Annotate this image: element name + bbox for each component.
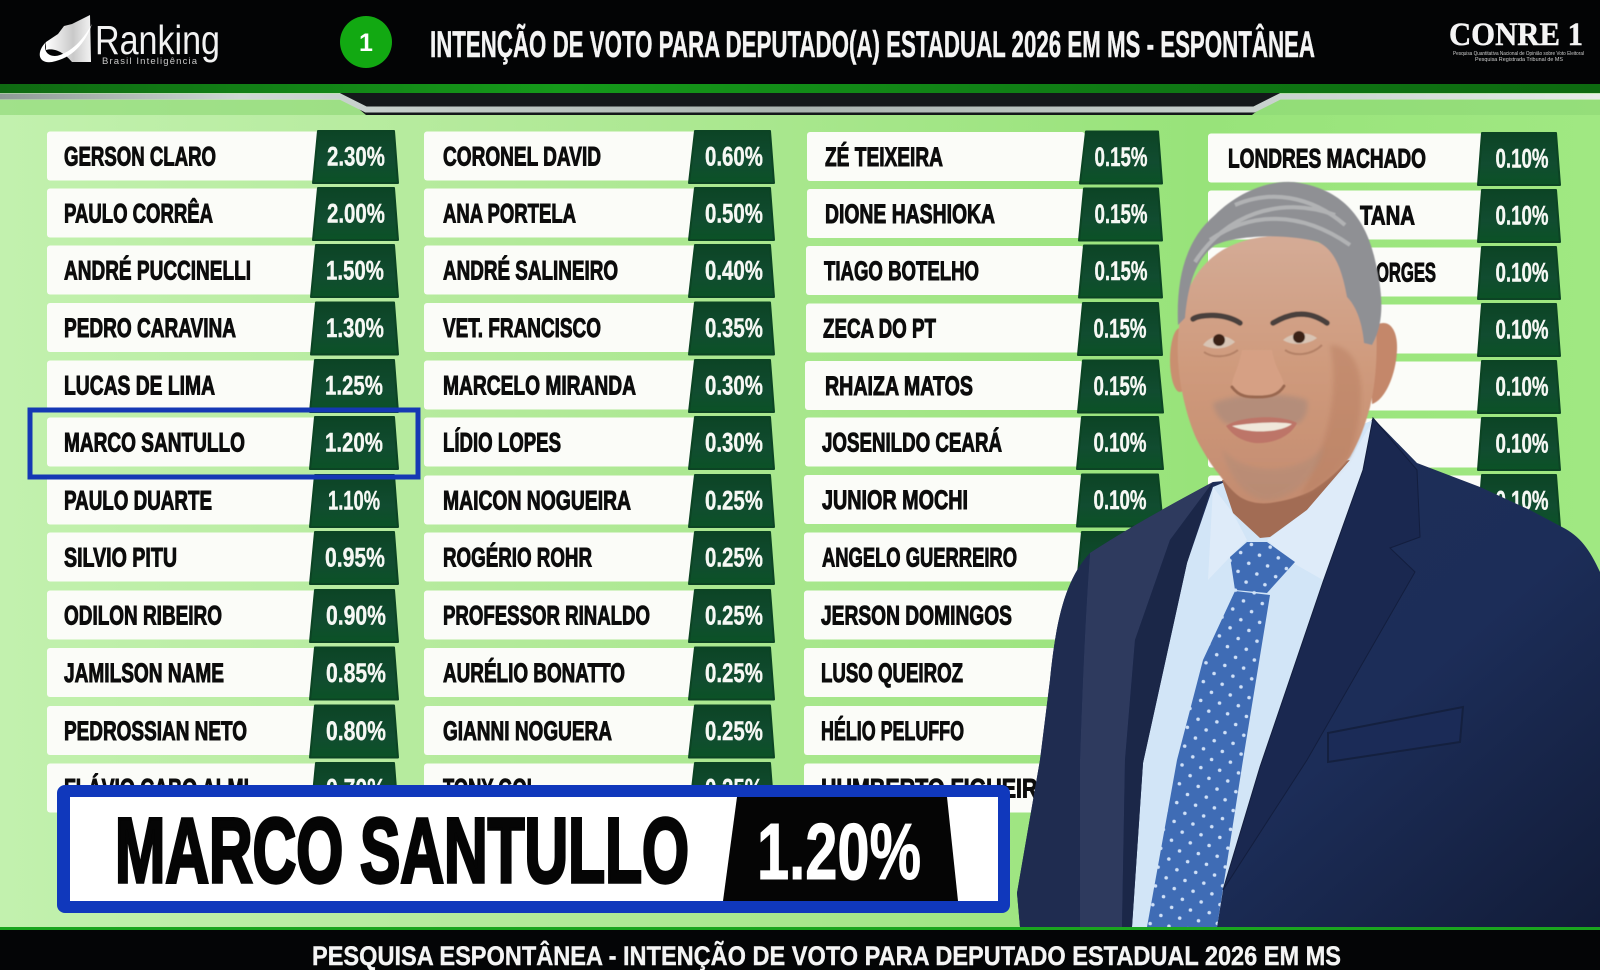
row: Rhaiza Matos: 0.15% <box>1094 371 1146 401</box>
row: Maicon Nogueira: MAICON NOGUEIRA <box>443 486 631 516</box>
row: Luso Queiroz <box>804 648 1082 697</box>
row: Zé Teixeira: 0.15% <box>1094 142 1148 172</box>
row: Londres Machado: LONDRES MACHADO <box>1228 144 1426 174</box>
row: Zeca do PT <box>806 303 1162 355</box>
row: André Puccinelli <box>47 245 398 297</box>
logo icon <box>40 15 92 62</box>
eyebrows <box>1193 315 1240 323</box>
row: Josenildo Ceará <box>805 417 1163 469</box>
highlight box around Marco Santullo row <box>30 410 418 477</box>
row: Professor Rinaldo: 0.25% <box>705 600 763 630</box>
row: Londres Machado <box>1208 133 1560 185</box>
row: Tony Gol: TONY GOL <box>443 774 538 804</box>
panel: candidates column 3 <box>804 132 1163 812</box>
row: hidden name 6 <box>1208 418 1560 470</box>
row: André Puccinelli: 1.50% <box>326 256 384 286</box>
row: Tony Gol: 0.25% <box>705 774 763 804</box>
hair <box>1178 182 1381 345</box>
row: hidden name 5 <box>1208 361 1560 413</box>
row: Paulo Corrêa <box>47 188 398 240</box>
row: Marco Santullo <box>47 417 398 469</box>
row: Zé Teixeira <box>807 132 1162 184</box>
row: Paulo Duarte: PAULO DUARTE <box>64 486 212 516</box>
row: Paulo Duarte <box>47 475 398 527</box>
callout black badge <box>723 797 958 901</box>
row: Aurélio Bonatto: AURÉLIO BONATTO <box>443 657 625 688</box>
row: Lucas de Lima: 1.25% <box>325 370 383 400</box>
row: Pedro Caravina: PEDRO CARAVINA <box>64 313 236 343</box>
row: Zeca do PT: 0.15% <box>1094 314 1146 344</box>
row: Jamilson Name <box>47 648 398 700</box>
row: Aurélio Bonatto <box>424 648 774 700</box>
callout white plate <box>70 797 998 901</box>
row: Junior Mochi: 0.10% <box>1094 485 1146 515</box>
callout percent: 1.20% <box>757 807 921 896</box>
row: Odilon Ribeiro: 0.90% <box>326 600 386 630</box>
row: Gianni Noguera <box>424 706 774 758</box>
row: Odilon Ribeiro: ODILON RIBEIRO <box>64 600 222 630</box>
row: Pedrossian Neto <box>47 706 398 758</box>
callout name: MARCO SANTULLO <box>115 800 689 902</box>
row: name ending in TANA <box>1208 190 1560 242</box>
row: Paulo Corrêa: PAULO CORRÊA <box>64 198 213 228</box>
row: Jamilson Name: 0.85% <box>326 658 386 688</box>
neck <box>1222 460 1350 538</box>
row: Gianni Noguera: GIANNI NOGUERA <box>443 716 612 746</box>
row: Tiago Botelho: 0.15% <box>1094 256 1148 286</box>
row: Rhaiza Matos <box>805 360 1163 412</box>
row: Tiago Botelho <box>806 246 1162 298</box>
footer bar <box>0 927 1600 970</box>
row: name ending in TANA: 0.10% <box>1496 200 1548 230</box>
row: hidden name 5: 0.10% <box>1496 372 1548 402</box>
row: name ending in ORGES: 0.10% <box>1496 258 1548 288</box>
header bar <box>0 0 1600 115</box>
face <box>1178 236 1377 503</box>
row: Ana Portela: 0.50% <box>705 198 763 228</box>
callout: Marco Santullo 1.20% <box>57 785 1010 913</box>
row: Paulo Duarte: 1.10% <box>328 486 380 516</box>
panel: candidates column 2 <box>424 131 774 815</box>
left jacket front <box>1080 482 1213 927</box>
left sleeve shadow <box>1017 553 1090 927</box>
row: hidden name 7 <box>1208 475 1560 527</box>
row: Coronel David <box>424 131 774 183</box>
row: hidden name 4 <box>1208 304 1560 356</box>
row: Josenildo Ceará: JOSENILDO CEARÁ <box>822 426 1002 458</box>
callout blue frame <box>57 785 1010 913</box>
row: Odilon Ribeiro <box>47 590 398 642</box>
mouth <box>1226 417 1297 443</box>
logo: Ranking Brasil Inteligência <box>40 15 220 67</box>
row: Lídio Lopes: 0.30% <box>705 428 763 458</box>
row: Silvio Pitu: 0.95% <box>325 542 385 572</box>
row: Tiago Botelho: TIAGO BOTELHO <box>824 256 979 286</box>
breast pocket <box>1328 707 1463 762</box>
shirt <box>1132 420 1373 927</box>
right cheek shade <box>1300 345 1361 496</box>
row: Pedro Caravina <box>47 302 398 354</box>
row: Maicon Nogueira: 0.25% <box>705 486 763 516</box>
row: Zé Teixeira: ZÉ TEIXEIRA <box>825 141 943 172</box>
row: Ana Portela <box>424 188 774 240</box>
row: Silvio Pitu <box>47 532 398 584</box>
ears <box>1170 328 1190 392</box>
row: Flávio Cabo Almi: FLÁVIO CABO ALMI <box>64 772 249 804</box>
suit body <box>1017 418 1600 927</box>
panel: candidates column 1 <box>47 131 398 815</box>
row: Josenildo Ceará: 0.10% <box>1094 428 1146 458</box>
row: Lídio Lopes <box>424 417 774 469</box>
row: Pedro Caravina: 1.30% <box>326 313 384 343</box>
row: André Salineiro <box>424 245 774 297</box>
row: Rhaiza Matos: RHAIZA MATOS <box>825 371 973 401</box>
row: Gerson Claro <box>47 131 398 183</box>
row: Marcelo Miranda: 0.30% <box>705 370 763 400</box>
row: Lucas de Lima: LUCAS DE LIMA <box>64 370 215 400</box>
row: Rogério Rohr: ROGÉRIO ROHR <box>443 542 592 572</box>
row: Marco Santullo: MARCO SANTULLO <box>64 428 245 458</box>
row: Rogério Rohr <box>424 532 774 584</box>
shirt collars <box>1208 420 1373 580</box>
row: hidden name 7: 0.10% <box>1496 486 1548 516</box>
silver trim <box>0 96 1600 110</box>
row: hidden name 6: 0.10% <box>1496 428 1548 458</box>
row: Gerson Claro: 2.30% <box>327 142 385 172</box>
green stripe <box>0 84 1600 93</box>
row: Ana Portela: ANA PORTELA <box>443 198 576 228</box>
row: hidden name 4: 0.10% <box>1496 314 1548 344</box>
row: Jerson Domingos <box>804 590 1082 640</box>
row: Junior Mochi <box>804 474 1163 526</box>
logo wordmark: Ranking <box>95 17 220 63</box>
row: Paulo Corrêa: 2.00% <box>327 198 385 228</box>
row: name ending in ORGES: ORGES <box>1376 258 1436 288</box>
left lapel <box>1122 482 1213 927</box>
row: André Salineiro: 0.40% <box>705 256 763 286</box>
row: Gerson Claro: GERSON CLARO <box>64 142 216 172</box>
logo tagline: Brasil Inteligência <box>102 56 198 67</box>
row: Angelo Guerreiro: ANGELO GUERREIRO <box>822 542 1017 572</box>
row: Angelo Guerreiro <box>804 532 1163 584</box>
dark hex strip <box>340 93 1280 115</box>
tie <box>1147 542 1295 927</box>
row: Dione Hashioka: 0.15% <box>1094 199 1148 229</box>
row: Rogério Rohr: 0.25% <box>705 542 763 572</box>
row: Humberto Figueira <box>804 764 1082 812</box>
row: Humberto Figueira: HUMBERTO FIGUEIRA <box>821 774 1053 804</box>
head <box>1170 182 1397 503</box>
row: Marcelo Miranda <box>424 360 774 412</box>
row: Luso Queiroz: LUSO QUEIROZ <box>821 658 963 688</box>
row: Flávio Cabo Almi: 0.70% <box>326 774 386 804</box>
row: Silvio Pitu: SILVIO PITU <box>64 542 177 572</box>
logo: Conre 1: Pesquisa Registrada Tribunal de MS <box>1475 57 1563 63</box>
row: Lucas de Lima <box>47 360 398 412</box>
row: Zeca do PT: ZECA DO PT <box>823 314 936 344</box>
chin shadow <box>1222 445 1325 500</box>
nose <box>1232 350 1284 396</box>
row: Professor Rinaldo: PROFESSOR RINALDO <box>443 600 650 630</box>
row: Gianni Noguera: 0.25% <box>705 716 763 746</box>
row: Marcelo Miranda: MARCELO MIRANDA <box>443 370 636 400</box>
row: Tony Gol <box>424 763 774 815</box>
stubble shadow <box>1213 394 1308 424</box>
row: Dione Hashioka <box>807 188 1162 240</box>
row: Vet. Francisco: VET. FRANCISCO <box>443 313 601 343</box>
row: Junior Mochi: JUNIOR MOCHI <box>822 485 968 515</box>
row: Vet. Francisco: 0.35% <box>705 313 763 343</box>
right lapel <box>1223 418 1420 890</box>
eye bags <box>1204 345 1322 356</box>
row: name ending in ORGES <box>1208 247 1560 299</box>
number badge <box>340 16 392 68</box>
row: Coronel David: 0.60% <box>705 142 763 172</box>
row: Londres Machado: 0.10% <box>1496 144 1548 174</box>
row: Flávio Cabo Almi <box>47 763 398 815</box>
row: André Salineiro: ANDRÉ SALINEIRO <box>443 254 618 286</box>
panel: candidates column 4 <box>1208 133 1560 527</box>
row: Aurélio Bonatto: 0.25% <box>705 658 763 688</box>
row: Lídio Lopes: LÍDIO LOPES <box>443 426 561 458</box>
photo: man in navy suit <box>1017 182 1600 927</box>
number badge: 1 <box>359 29 373 57</box>
eyes <box>1203 336 1235 348</box>
row: Dione Hashioka: DIONE HASHIOKA <box>825 199 995 229</box>
row: Professor Rinaldo <box>424 590 774 642</box>
row: Jerson Domingos: JERSON DOMINGOS <box>821 600 1012 630</box>
row: Hélio Peluffo <box>804 706 1082 755</box>
row: André Puccinelli: ANDRÉ PUCCINELLI <box>64 254 251 286</box>
row: name ending in TANA: TANA <box>1360 200 1415 230</box>
row: Coronel David: CORONEL DAVID <box>443 142 601 172</box>
logo: Conre 1: CONRE 1 <box>1449 17 1583 53</box>
row: Pedrossian Neto: 0.80% <box>326 716 386 746</box>
row: Pedrossian Neto: PEDROSSIAN NETO <box>64 716 247 746</box>
row: Maicon Nogueira <box>424 475 774 527</box>
row: Hélio Peluffo: HÉLIO PELUFFO <box>821 715 964 746</box>
row: Vet. Francisco <box>424 302 774 354</box>
row: Jamilson Name: JAMILSON NAME <box>64 658 224 688</box>
row: Marco Santullo: 1.20% <box>325 428 383 458</box>
